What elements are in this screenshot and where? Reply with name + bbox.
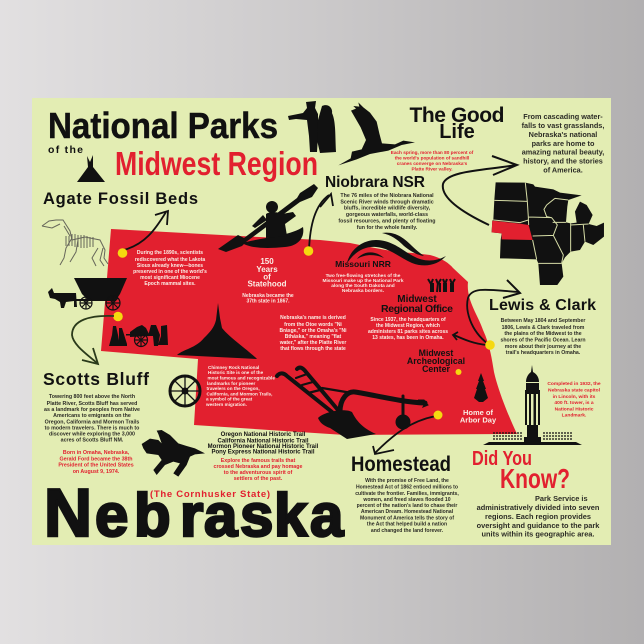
text: Scotts Bluff description: as a landmark for peoples from Native	[44, 407, 140, 413]
text: Lewis and Clark description: shores of the Pacific Ocean. Learn	[500, 338, 586, 344]
text: crane fact: Platte River valley.	[411, 166, 453, 172]
text: Niobrara description: Scenic River winds through dramatic	[340, 200, 434, 206]
marker: Lewis and Clark	[485, 340, 495, 350]
text: Homestead description: women, and freed slaves flooded 10	[362, 497, 451, 503]
icon: sandhill crane	[338, 102, 415, 165]
text: Homestead description	[355, 478, 459, 534]
text: Homestead description: cultivate the frontier. Families, immigrants,	[355, 491, 459, 497]
text: Homestead description: the Act that helped build a nation	[367, 522, 447, 528]
arrow: Agate to heading	[124, 211, 168, 250]
text: trails description	[214, 458, 302, 482]
text: Niobrara description	[338, 193, 436, 231]
text: Did You Know description: regions. Each region provides	[485, 512, 591, 521]
text: Niobrara description: fun for the whole family.	[357, 225, 418, 231]
text: capitol fact: Nebraska state capitol	[548, 388, 601, 394]
heading: Midwest Archeological Center	[407, 348, 465, 374]
text: capitol fact: Completed in 1932, the	[547, 381, 601, 387]
heading: Midwest Archeological Center: Archeological	[407, 356, 465, 366]
text: 150 Years of Statehood	[242, 257, 294, 304]
text: name origin: Brásge," or the Omaha's "Ni	[279, 328, 347, 334]
text: Gerald Ford fact	[58, 450, 134, 475]
marker: Niobrara	[304, 246, 313, 256]
icon: Missouri river waves	[347, 233, 446, 265]
text: capitol fact: 400 ft. tower, is a	[554, 400, 594, 406]
heading: Did You Know?: Did You	[472, 448, 532, 470]
text: Lewis and Clark description: the plains of the Midwest to the	[504, 331, 582, 337]
text: Homestead description: Homestead Act of 1862 enticed millions to	[356, 484, 458, 490]
title: National Parks	[48, 105, 278, 146]
text: Scotts Bluff description: Towering 800 feet above the North	[49, 394, 135, 400]
arrow: intro to map	[443, 156, 517, 225]
text: Scotts Bluff description: Oregon, California and Mormon Trails	[45, 420, 139, 426]
text: Chimney Rock description: landmarks for pioneer	[207, 381, 255, 386]
heading: Agate Fossil Beds: Agate Fossil Beds	[43, 190, 198, 208]
text: trails description: settlers of the past.	[234, 476, 283, 482]
text: Regional Office description: 13 states, has been in Omaha.	[372, 335, 444, 341]
text: intro: amazing natural beauty,	[522, 148, 604, 156]
marker: Scotts Bluff	[113, 312, 123, 321]
icon: tepee	[77, 155, 105, 182]
heading: Midwest Regional Office: Regional Office	[381, 303, 453, 315]
text: name origin: that flows through the state	[280, 346, 346, 352]
icon: Chimney Rock	[177, 303, 257, 359]
text: Homestead description: and changed the land forever.	[371, 528, 444, 534]
text: Home of Arbor Day	[460, 408, 497, 424]
heading: Midwest Regional Office	[381, 294, 453, 315]
text: name origin: water," after the Platte River	[279, 340, 346, 346]
heading: Lewis & Clark: Lewis & Clark	[489, 297, 596, 314]
text: 150 Years of Statehood: of	[263, 272, 271, 282]
heading: Scotts Bluff: Scotts Bluff	[43, 369, 149, 389]
text: name origin: Btháska," meaning "flat	[285, 334, 342, 340]
text: trail names: Oregon National Historic Trail	[221, 432, 306, 438]
icon: plow	[277, 368, 428, 439]
text: Missouri description: Nebraska borders.	[342, 288, 384, 294]
text: trails description: crossed Nebraska and pay homage	[214, 464, 302, 470]
heading: Did You Know?	[472, 448, 570, 494]
text: capitol fact	[547, 381, 601, 418]
text: Home of Arbor Day: Arbor Day	[460, 416, 497, 424]
text: Did You Know description	[477, 494, 600, 538]
text: trail names: California National Historic Trail	[217, 438, 309, 444]
text: Gerald Ford fact: Gerald Ford became the 38th	[59, 456, 133, 462]
text: Lewis and Clark description: Between May 1804 and September	[501, 318, 585, 324]
text: name origin: from the Otoe words "Ni	[284, 322, 342, 328]
text: Scotts Bluff description	[44, 394, 140, 444]
marker: Homestead	[434, 410, 442, 420]
text: Missouri description	[322, 273, 404, 294]
text: Regional Office description: administers 81 parks sites across	[368, 329, 448, 335]
text: Scotts Bluff description: to modern travelers. There is much to	[45, 426, 140, 432]
text: Niobrara description: The 76 miles of the Niobrara National	[340, 193, 434, 199]
text: Scotts Bluff description: Americans to emigrants on the	[53, 413, 131, 419]
icon: fossil skeleton	[42, 220, 108, 266]
heading: Midwest Archeological Center: Midwest	[419, 348, 453, 358]
text: trail names: Pony Express National Historic Trail	[211, 450, 315, 456]
text: trail names: Mormon Pioneer National Historic Trail	[208, 444, 319, 450]
text: Lewis and Clark description: trail's headquarters in Omaha.	[506, 350, 581, 356]
text: Agate Fossil Beds description: Sioux already knew—bones	[137, 263, 203, 269]
text: Homestead description: With the promise of Free Land, the	[365, 478, 449, 484]
text: Did You Know description: administratively divided into seven	[477, 503, 600, 512]
title: Midwest Region	[115, 145, 318, 182]
text: 150 Years of Statehood: 37th state in 1867.	[246, 298, 290, 304]
icon: covered wagon and oxen	[48, 278, 127, 310]
arrow: Niobrara	[309, 194, 333, 250]
text: Scotts Bluff description: discover while exploring the 3,000	[49, 432, 135, 438]
text: Did You Know description: Park Service is	[535, 494, 588, 503]
title: Nebraska: N	[44, 475, 92, 551]
text: Lewis and Clark description	[500, 318, 586, 356]
text: Agate Fossil Beds description	[133, 250, 207, 287]
text: name origin	[279, 315, 347, 352]
text: Chimney Rock description: California, and Mormon Trails,	[206, 392, 272, 396]
heading: Midwest Regional Office: Midwest	[397, 294, 437, 305]
text: Regional Office description	[368, 317, 448, 341]
heading: The Good Life	[410, 104, 504, 143]
text: Did You Know description: oversight and guidance to the park	[477, 521, 600, 530]
heading: The Good Life: The Good	[410, 104, 504, 127]
text: Agate Fossil Beds description: rediscovered what the Lakota	[135, 257, 205, 263]
text: Chimney Rock description: a symbol of the great	[206, 396, 253, 402]
icon: crowd silhouettes	[428, 279, 455, 292]
text: The Cornhusker State: (The Cornhusker State)	[150, 489, 270, 500]
text: 150 Years of Statehood: Years	[256, 265, 278, 274]
heading: Missouri NRR: Missouri NRR	[335, 259, 391, 269]
text: Agate Fossil Beds description: During the 1890s, scientists	[137, 250, 203, 256]
text: 150 Years of Statehood: 150	[260, 257, 274, 266]
text: Gerald Ford fact: on August 9, 1974.	[73, 469, 120, 475]
text: Homestead description: Monument of America tells the story of	[360, 516, 454, 522]
arrow: Homestead	[373, 416, 436, 454]
text: Chimney Rock description: western migration.	[205, 402, 247, 407]
poster panel	[32, 98, 611, 545]
text: Missouri description: along the South Dakota and	[331, 283, 395, 289]
text: Homestead description: percent of the nation's land to chase their	[357, 503, 457, 509]
heading: Midwest Archeological Center: Center	[422, 364, 451, 374]
title: of the	[48, 144, 83, 156]
text: Did You Know description: units within its geographic area.	[482, 530, 594, 538]
text: trail names	[208, 432, 319, 456]
text: Missouri description: Missouri make up the National Park	[322, 278, 404, 284]
text: intro: From cascading water-	[523, 112, 603, 121]
text: Chimney Rock description: Historic Site is one of the	[208, 370, 264, 375]
text: Niobrara description: fossil resources, and plenty of floating	[338, 218, 436, 224]
heading: Niobrara NSR: Niobrara NSR	[325, 174, 425, 191]
heading: Did You Know?: Know?	[500, 463, 570, 494]
text: intro: falls to vast grasslands,	[522, 121, 604, 130]
text: capitol fact: in Lincoln, with its	[553, 394, 596, 400]
text: Missouri description: Two free-flowing stretches of the	[326, 273, 401, 279]
text: crane fact: Each spring, more than 80 percent of	[391, 150, 474, 155]
text: Scotts Bluff description: Platte River, Scotts Bluff has served	[47, 401, 137, 407]
heading: Homestead: Homestead	[351, 453, 451, 476]
heading: The Good Life: Life	[439, 121, 475, 143]
text: Chimney Rock description: most famous and recognizable	[208, 376, 275, 380]
arrow: Lewis and Clark trail	[453, 280, 520, 345]
text: crane fact	[391, 150, 474, 172]
text: Regional Office description: Since 1937, the headquarters of	[370, 317, 446, 323]
text: Agate Fossil Beds description: Epoch mammal sites.	[144, 281, 196, 287]
text: Niobrara description: bluffs, incredible wildlife diversity,	[344, 206, 431, 212]
text: intro: history, and the stories	[523, 156, 603, 166]
text: 150 Years of Statehood: Statehood	[247, 280, 287, 288]
title: Nebraska: ebraska	[95, 482, 344, 549]
text: Gerald Ford fact: President of the United States	[58, 462, 134, 468]
text: capitol fact: National Historic	[555, 406, 594, 412]
text: Home of Arbor Day: Home of	[463, 408, 494, 417]
text: intro: Nebraska's national	[529, 130, 597, 139]
text: Lewis and Clark description: more about their journey at the	[505, 344, 581, 350]
text: Gerald Ford fact: Born in Omaha, Nebraska,	[63, 450, 130, 456]
text: intro	[522, 112, 604, 174]
icon: pioneers and carriage	[109, 325, 168, 346]
icon: wagon wheel	[170, 376, 200, 406]
text: Lewis and Clark description: 1806, Lewis & Clark traveled from	[502, 325, 585, 331]
text: intro: of America.	[543, 166, 583, 174]
marker: Agate	[118, 248, 127, 258]
icon: kayaker	[218, 184, 318, 252]
text: name origin: Nebraska's name is derived	[280, 315, 346, 321]
marker: Archeological Center	[456, 369, 462, 375]
text: capitol fact: Landmark.	[562, 412, 587, 418]
map: Nebraska state shape	[101, 229, 517, 435]
text: Chimney Rock description: Chimney Rock National	[208, 365, 259, 370]
text: Agate Fossil Beds description: most significant Miocene	[140, 275, 200, 281]
icon: pony express rider	[142, 430, 205, 477]
text: intro: parks are home to	[532, 139, 595, 148]
arrow: Scotts Bluff	[72, 316, 114, 364]
text: 150 Years of Statehood: Nebraska became the	[242, 293, 294, 299]
text: Homestead description: American Dream. Homestead National	[361, 509, 454, 515]
text: Chimney Rock description: travelers on the Oregon,	[206, 386, 260, 391]
text: trails description: Explore the famous trails that	[221, 458, 295, 464]
icon: Nebraska state capitol	[483, 365, 582, 445]
icon: soldier and guide figures	[288, 101, 336, 153]
map: Midwest states	[492, 182, 604, 285]
text: Scotts Bluff description: acres of Scotts Bluff NM.	[61, 438, 124, 444]
text: Regional Office description: the Midwest Region, which	[376, 323, 440, 329]
text: trails description: to the adventurous spirit of	[224, 470, 293, 476]
text: Chimney Rock description	[205, 365, 275, 407]
text: Agate Fossil Beds description: preserved in one of the world's	[133, 269, 207, 275]
text: crane fact: cranes converge on Nebraska's	[397, 161, 468, 166]
icon: pine tree	[474, 373, 488, 402]
title	[48, 105, 318, 182]
text: crane fact: the world's population of sandhill	[395, 156, 469, 160]
text: Niobrara description: gorgeous waterfalls, world-class	[346, 212, 428, 218]
